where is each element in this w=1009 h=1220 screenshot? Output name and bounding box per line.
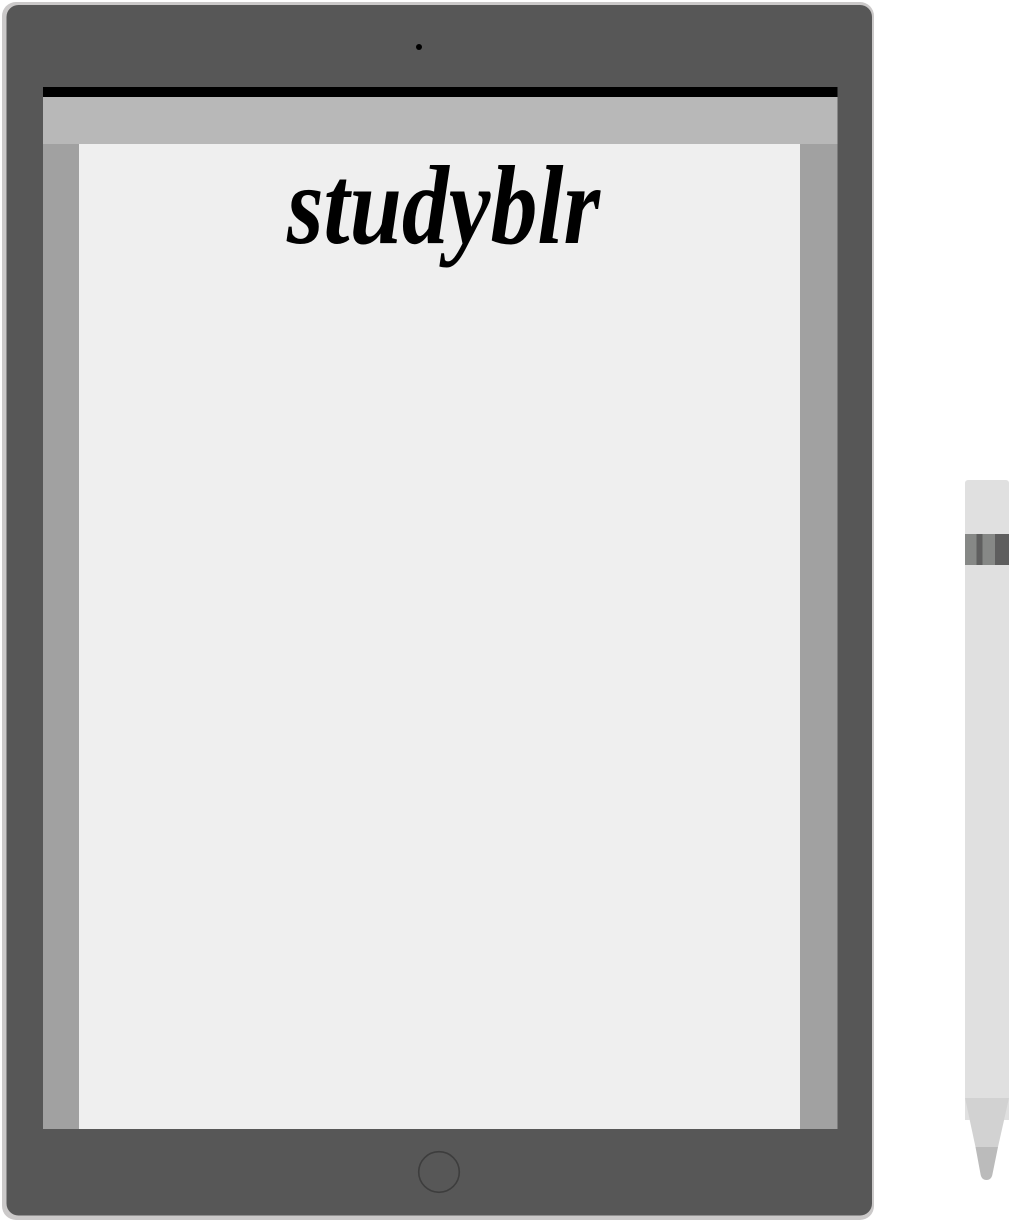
toolbar [43,97,838,144]
page area [79,144,800,1129]
pencil tip cone [965,1098,1009,1147]
right sidebar [800,144,838,1129]
pencil band [965,534,1009,565]
screen [43,87,838,1129]
camera [416,44,422,50]
title: studyblr [286,144,601,268]
pencil body [965,480,1009,1120]
left sidebar [43,144,79,1129]
home button [419,1152,459,1192]
status bar [43,87,838,97]
pencil nib [976,1147,998,1180]
stylus pencil [965,480,1009,1180]
